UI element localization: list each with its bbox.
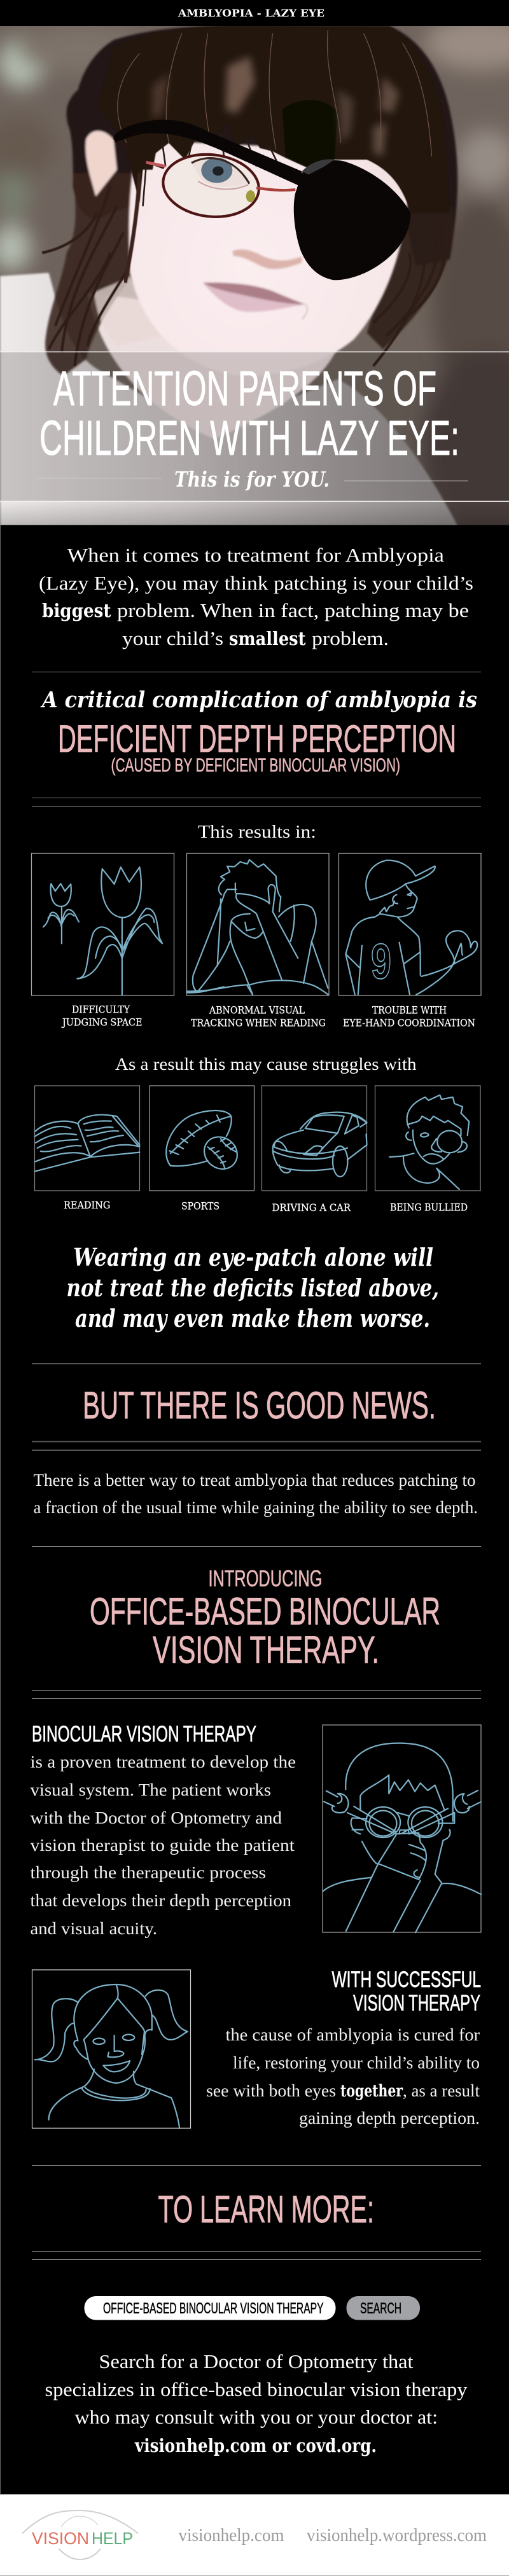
struggles heading: As a result this may cause struggles with: [115, 1055, 417, 1074]
search paragraph: visionhelp.com or covd.org.: [134, 2435, 377, 2456]
text block: binocular vision therapy: vision therapist to guide the patient: [31, 1836, 295, 1855]
search button: SEARCH: [360, 2300, 401, 2317]
panel: happy girl: [32, 1970, 191, 2128]
text block: binocular vision therapy: BINOCULAR VISION THERAPY: [32, 1722, 256, 1747]
search paragraph: Search for a Doctor of Optometry that: [99, 2350, 414, 2372]
footer: [0, 2495, 509, 2576]
panel: bullied: [375, 1086, 480, 1214]
icon: two tulips: [43, 867, 162, 995]
intro paragraph: problem. When in fact, patching may be: [117, 599, 469, 621]
caption: DIFFICULTY: [72, 1004, 130, 1016]
hero photo: child with eye patch: [0, 17, 509, 549]
caption: SPORTS: [181, 1201, 220, 1212]
eye-patch warning statement: [66, 1243, 439, 1333]
text block: with successful vision therapy: see with both eyes: [206, 2081, 336, 2100]
hero heading: [39, 361, 459, 466]
search paragraph: [45, 2350, 468, 2456]
text block: with successful vision therapy: gaining depth perception.: [299, 2109, 480, 2128]
intro paragraph: your child’s: [122, 627, 223, 649]
icon: child with therapy glasses: [323, 1743, 481, 1932]
eye-patch warning statement: Wearing an eye-patch alone will: [73, 1243, 433, 1271]
panel: reading: [34, 1086, 140, 1211]
VisionHelp logo: [22, 2510, 138, 2559]
text block: binocular vision therapy: through the therapeutic process: [31, 1863, 266, 1882]
search paragraph: specializes in office-based binocular vision therapy: [45, 2378, 468, 2400]
heading: introducing office-based binocular vision therapy: [90, 1565, 440, 1672]
back hair: [45, 26, 457, 376]
caption: [191, 1005, 326, 1029]
footer links: [178, 2526, 487, 2545]
footer links: visionhelp.wordpress.com: [307, 2526, 487, 2545]
caption: READING: [64, 1200, 111, 1211]
caption: TROUBLE WITH: [372, 1005, 447, 1016]
text block: binocular vision therapy: [31, 1722, 296, 1938]
icon: smiling girl with pigtails: [35, 1984, 188, 2128]
text block: binocular vision therapy: visual system. The patient works: [31, 1780, 271, 1799]
text block: with successful vision therapy: together: [340, 2082, 403, 2101]
intro paragraph: [39, 544, 473, 649]
icon: boy with eye patch: [389, 1095, 469, 1189]
jersey number: 9: [371, 933, 391, 989]
search button: [346, 2296, 420, 2320]
search input: [84, 2296, 336, 2320]
better way paragraph: a fraction of the usual time while gaining the ability to see depth.: [33, 1498, 478, 1517]
text block: binocular vision therapy: that develops their depth perception: [31, 1891, 292, 1910]
panel: driving: [262, 1086, 367, 1214]
icon: football and baseball: [166, 1111, 241, 1170]
eye-patch warning statement: and may even make them worse.: [75, 1304, 430, 1333]
icon: boy rubbing eyes over book: [186, 860, 328, 995]
hero subheading with flanking lines: This is for YOU.: [174, 467, 330, 492]
side strands: [42, 186, 447, 366]
text block: binocular vision therapy: with the Doctor of Optometry and: [31, 1808, 282, 1827]
caption: [343, 1005, 475, 1029]
intro paragraph: biggest: [42, 600, 111, 621]
panel: abnormal visual tracking: [186, 854, 329, 1029]
heading: deficient depth perception: [58, 717, 456, 776]
intro paragraph: smallest: [229, 628, 306, 649]
heading: introducing office-based binocular vision therapy: INTRODUCING: [209, 1565, 322, 1591]
caption: TRACKING WHEN READING: [191, 1018, 326, 1029]
icon: open book: [35, 1115, 139, 1172]
VisionHelp logo: HELP: [92, 2529, 133, 2548]
better way paragraph: [33, 1471, 478, 1517]
panel: difficulty judging space: [32, 854, 174, 1028]
face: [129, 140, 409, 376]
caption: [61, 1004, 143, 1028]
intro paragraph: When it comes to treatment for Amblyopia: [67, 544, 444, 566]
this results in: This results in:: [198, 822, 316, 842]
caption: ABNORMAL VISUAL: [209, 1005, 305, 1016]
better way paragraph: There is a better way to treat amblyopia that reduces patching to: [33, 1471, 475, 1490]
search input: OFFICE-BASED BINOCULAR VISION THERAPY: [103, 2300, 323, 2317]
caption: EYE-HAND COORDINATION: [343, 1018, 475, 1029]
text block: with successful vision therapy: [206, 1967, 481, 2128]
heading: to learn more: TO LEARN MORE:: [158, 2188, 374, 2231]
footer links: visionhelp.com: [178, 2526, 284, 2545]
text block: with successful vision therapy: life, restoring your child’s ability to: [233, 2053, 480, 2072]
glasses and eye: [114, 138, 295, 221]
top title bar: AMBLYOPIA - LAZY EYE: [178, 7, 324, 19]
heading: introducing office-based binocular vision therapy: VISION THERAPY.: [153, 1628, 379, 1672]
caption: BEING BULLIED: [390, 1202, 468, 1214]
panel: child doing vision therapy: [323, 1725, 481, 1932]
icon: boy in baseball cap: [345, 861, 477, 995]
panel: sports: [150, 1086, 254, 1212]
hair fringe: [97, 26, 450, 213]
caption: JUDGING SPACE: [61, 1017, 143, 1028]
search paragraph: who may consult with you or your doctor at:: [75, 2406, 438, 2428]
intro paragraph: (Lazy Eye), you may think patching is your child’s: [39, 572, 473, 594]
eye patch and strap: [114, 120, 410, 280]
page edge: [0, 525, 509, 2576]
search bar: [84, 2296, 420, 2320]
text block: binocular vision therapy: is a proven treatment to develop the: [31, 1752, 296, 1771]
text block: with successful vision therapy: the cause of amblyopia is cured for: [225, 2025, 480, 2044]
text block: binocular vision therapy: and visual acuity.: [31, 1919, 157, 1938]
intro paragraph: problem.: [312, 627, 389, 649]
top title bar: [0, 0, 509, 26]
caption: DRIVING A CAR: [272, 1202, 351, 1214]
panel: eye-hand coordination: [338, 854, 481, 1029]
text block: with successful vision therapy: , as a result: [403, 2081, 480, 2100]
translucent band behind hero title: [0, 351, 509, 525]
icon: car: [273, 1112, 367, 1177]
critical complication statement: A critical complication of amblyopia is: [40, 687, 477, 713]
VisionHelp logo: VISION: [32, 2529, 89, 2548]
